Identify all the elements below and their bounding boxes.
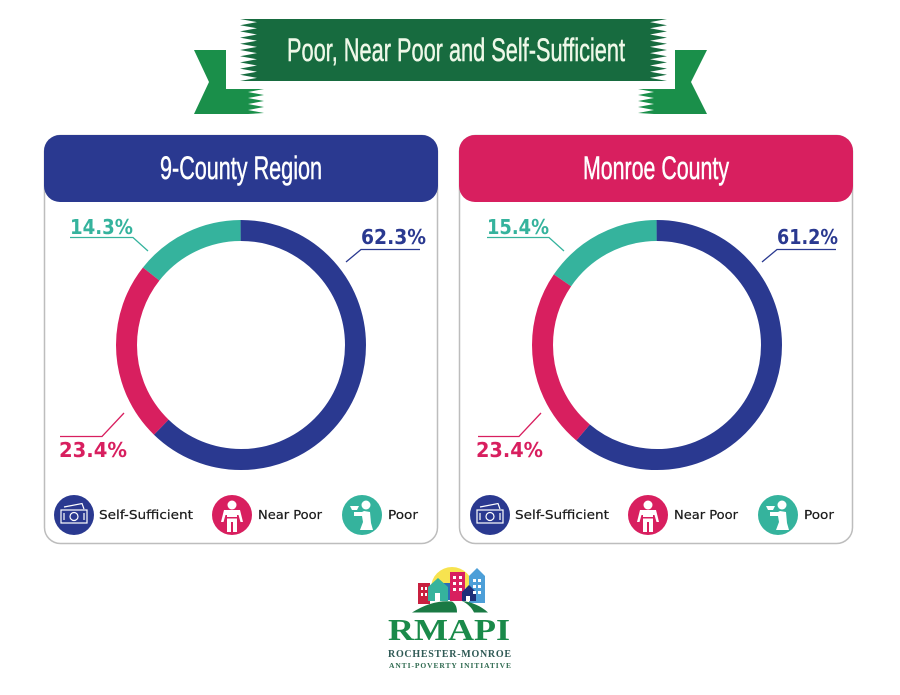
label: self-sufficient 61.2%: 61.2% bbox=[777, 225, 838, 249]
label: self-sufficient 62.3% bbox=[346, 225, 426, 262]
label: near poor 23.4% bbox=[59, 413, 127, 462]
donut chart bbox=[542, 230, 772, 460]
legend label: self-sufficient: Self-Sufficient bbox=[515, 508, 609, 522]
title text: Poor, Near Poor and Self-Sufficient bbox=[287, 32, 625, 68]
legend label: near poor: Near Poor bbox=[674, 508, 738, 522]
panel: Monroe County bbox=[459, 135, 853, 544]
legend label: poor: Poor bbox=[804, 508, 834, 522]
icon: near poor person bbox=[212, 495, 252, 535]
logo: RMAPI wordmark: RMAPI bbox=[388, 612, 510, 647]
icon: money bbox=[470, 495, 510, 535]
donut chart bbox=[126, 230, 356, 460]
logo: anti-poverty initiative line: ANTI-POVERTY INITIATIVE bbox=[389, 661, 511, 670]
icon: money bbox=[54, 495, 94, 535]
banner right tail bbox=[638, 50, 707, 114]
logo: skyline icon bbox=[412, 567, 488, 612]
panel heading: 9-County Region bbox=[160, 150, 322, 186]
legend label: self-sufficient: Self-Sufficient bbox=[99, 508, 193, 522]
panel frame bbox=[460, 136, 852, 544]
banner left tail bbox=[194, 50, 264, 114]
label: near poor 23.4%: 23.4% bbox=[476, 438, 543, 462]
legend bbox=[54, 495, 418, 535]
label: poor 14.3% bbox=[70, 215, 148, 251]
legend label: poor: Poor bbox=[388, 508, 418, 522]
label: poor 15.4%: 15.4% bbox=[487, 215, 549, 239]
panel heading: Monroe County bbox=[583, 150, 729, 186]
icon: poor kneeling person bbox=[758, 495, 798, 535]
logo: rochester-monroe line: ROCHESTER-MONROE bbox=[388, 649, 511, 660]
panel header bbox=[459, 135, 853, 202]
label: near poor 23.4%: 23.4% bbox=[59, 438, 127, 462]
label: self-sufficient 61.2% bbox=[762, 225, 838, 262]
panel header bbox=[44, 135, 438, 202]
legend label: near poor: Near Poor bbox=[258, 508, 322, 522]
label: poor 14.3%: 14.3% bbox=[70, 215, 133, 239]
icon: near poor person bbox=[628, 495, 668, 535]
label: self-sufficient 62.3%: 62.3% bbox=[361, 225, 426, 249]
RMAPI logo bbox=[388, 567, 511, 670]
label: poor 15.4% bbox=[487, 215, 564, 251]
banner main ribbon bbox=[240, 19, 667, 81]
legend bbox=[470, 495, 834, 535]
icon: poor kneeling person bbox=[342, 495, 382, 535]
panel frame bbox=[44, 136, 438, 544]
title banner bbox=[194, 19, 707, 114]
label: near poor 23.4% bbox=[476, 413, 543, 462]
panel: 9-County Region bbox=[44, 135, 438, 544]
